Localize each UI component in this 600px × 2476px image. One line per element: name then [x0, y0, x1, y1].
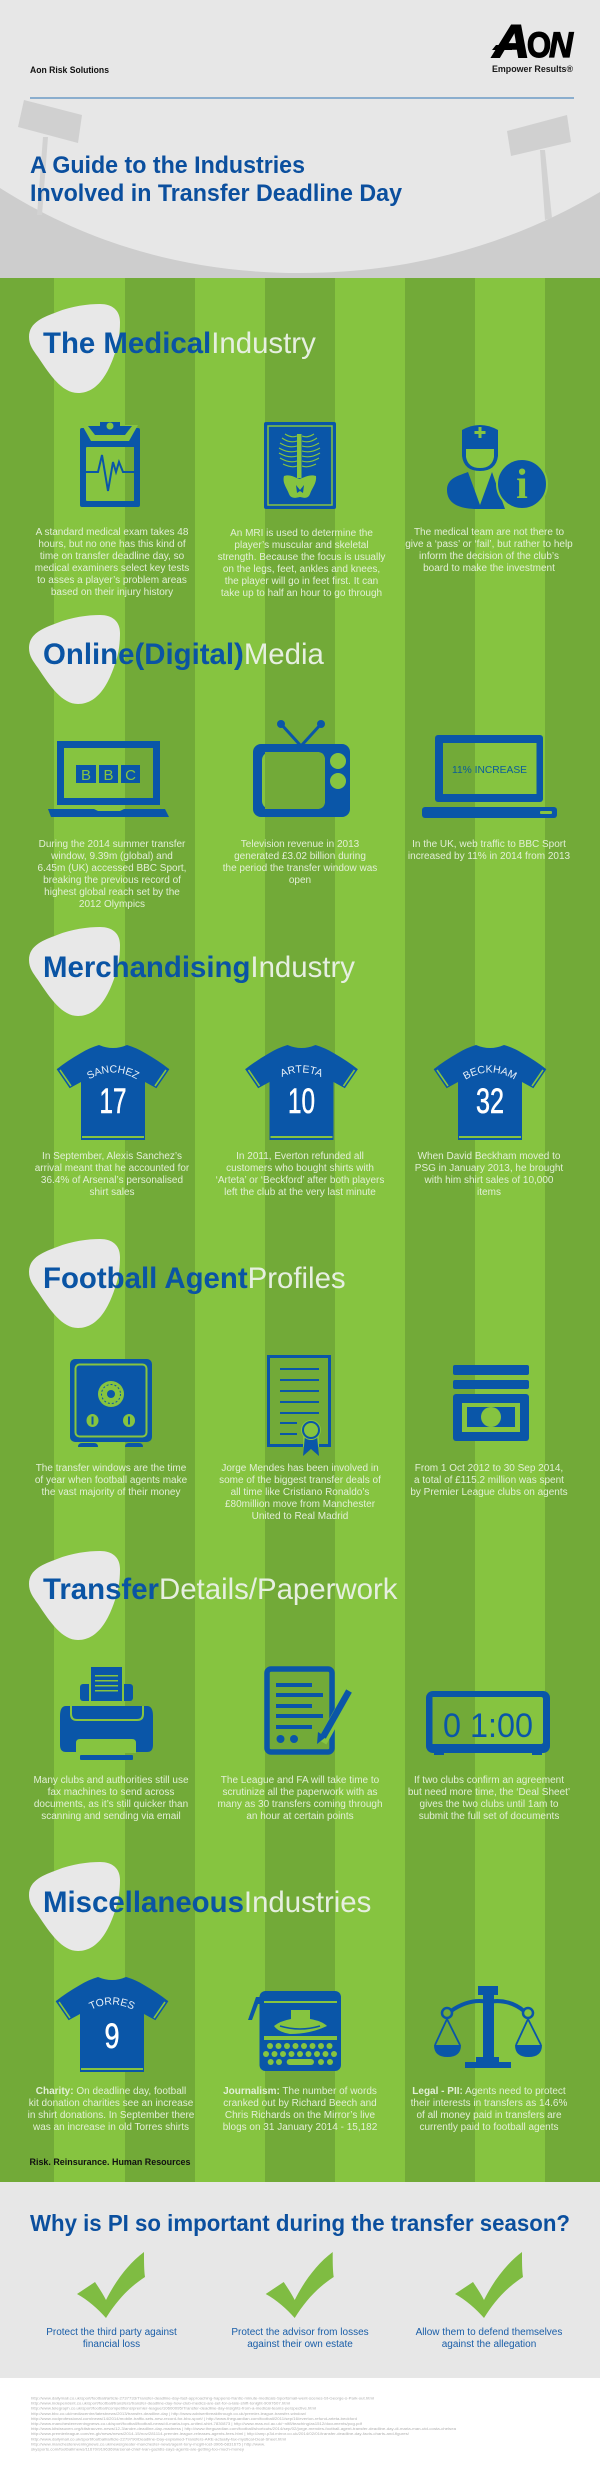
icon: scales of justice — [434, 1986, 542, 2068]
text: medical exam: based on their injury history — [51, 587, 173, 598]
panel: miscellaneous industries — [28, 1862, 568, 2168]
text: league paperwork: an hour at certain points — [246, 1811, 354, 1822]
text: web traffic: In the UK, web traffic to BBC Sport — [412, 839, 566, 850]
text: television revenue: Television revenue in 2013 — [241, 839, 360, 850]
text: fax machines: documents, as it’s still quicker than — [34, 1799, 188, 1810]
references: http://www.kitstrauven.org/kitstrauven-news/12-3/andre-deadline-day-madness | http://www.theguardian.com/football/shortcuts/2014/sep/02/jorge-mendes-football-agent-transfer-deadline-day-di-maria-man-utd-costa-chelsea — [31, 2426, 457, 2431]
background: header stadium — [0, 0, 600, 278]
text: BBC Sport reach: During the 2014 summer transfer — [39, 839, 186, 850]
logo: Aon Empower Results: Empower Results® — [492, 64, 573, 75]
logo: Aon Empower Results: N — [549, 26, 574, 65]
references: http://www.telegraph.co.uk/sport/football/competitions/premier-league/10600095/Transfer-deadline-day-insights-from-a-medical-teams-perspective.html — [31, 2406, 316, 2410]
logo: Aon Empower Results — [492, 15, 574, 75]
text: Jorge Mendes: all time like Cristiano Ronaldo’s — [231, 1487, 369, 1498]
icon: laptop with BBC logo: B — [103, 767, 114, 784]
text: Jorge Mendes: some of the biggest transfer deals of — [219, 1475, 381, 1486]
references: http://www.dailymail.co.uk/sport/football/article-2279790/Deadline-Day-explained-Transfers-ARE-actually-fax-mystical-Deal-Sheet.html — [31, 2436, 286, 2442]
text: transfer windows: the vast majority of their money — [42, 1487, 180, 1498]
heading: the medical industry: The MedicalIndustry — [43, 327, 316, 360]
icon: certificate — [268, 1356, 330, 1456]
text: Beckham: When David Beckham moved to — [418, 1151, 561, 1162]
text: MRI: on the legs, feet, ankles and knees, — [223, 564, 380, 575]
text: legal: Legal - PII: Agents need to protect — [412, 2086, 566, 2097]
text: medical exam: A standard medical exam takes 48 — [36, 527, 189, 538]
text: protect third party: financial loss — [83, 2339, 140, 2350]
text: agent spending: by Premier League clubs on agents — [410, 1487, 568, 1498]
text: deal sheet: If two clubs confirm an agreement — [414, 1775, 564, 1786]
text: transfer windows: of year when football agents make — [35, 1475, 188, 1486]
icon: typewriter — [248, 1991, 341, 2071]
references: http://www.manchestereveningnews.co.uk/sport/football/football-news/di-maria-tops-united-shirt-7830873 | http://www.mas.ncl.ac.uk/~nlf8/teaching/as1512/documents/pog.pdf — [31, 2421, 363, 2426]
icon: banknote stack — [453, 1365, 529, 1441]
text: league paperwork: scrutinize all the paperwork with as — [222, 1787, 378, 1798]
heading: online digital media: Online(Digital)Media — [43, 638, 325, 671]
heading: the medical industry — [29, 304, 316, 393]
text: Everton refund: customers who bought shirts with — [226, 1163, 374, 1174]
references: http://www.bbc.co.uk/mediacentre/latestnews/2013/transfer-deadline-day | http://www.advisertbreakthrough.co.uk/premier-league-transfer-window/ — [31, 2411, 307, 2416]
icon: clipboard with heart trace — [80, 422, 140, 507]
text: Sanchez: arrival meant that he accounted for — [35, 1163, 190, 1174]
text: protect advisor: Protect the advisor from losses — [231, 2327, 369, 2338]
text: television revenue: the period the transfer window was — [223, 863, 377, 874]
icon: x-ray — [264, 422, 336, 509]
heading: miscellaneous industries: MiscellaneousIndustries — [43, 1886, 371, 1919]
heading: merchandising industry: MerchandisingIndustry — [43, 951, 355, 984]
text: MRI: player’s muscular and skeletal — [234, 540, 369, 551]
text: league paperwork: The League and FA will take time to — [221, 1775, 380, 1786]
text: medical exam: hours, but no one has this kind of — [38, 539, 186, 550]
icon: digital clock — [426, 1691, 550, 1755]
references: http://www.premierleague.com/en-gb/news/news/2014-15/nov/281114-premier-league-releases-agents-fees.html | http://amp.p3d.mirror.co.uk/2014/02/01/transfer-deadline-day-facts-charts-and-figures/ — [31, 2431, 410, 2436]
text: charity: kit donation charities see an increase — [29, 2098, 194, 2109]
icon: laptop with 11% increase — [422, 735, 557, 818]
text: medical team: board to make the investment — [423, 563, 555, 574]
icon: check mark one — [77, 2252, 145, 2318]
heading: transfer details/paperwork: TransferDetails/Paperwork — [43, 1573, 398, 1606]
text: Jorge Mendes: Jorge Mendes has been involved in — [221, 1463, 379, 1474]
text: legal: their interests in transfers as 14.6% — [411, 2098, 567, 2109]
icon: laptop with 11% increase: 11% INCREASE — [452, 764, 527, 776]
text: journalism: Journalism: The number of words — [223, 2086, 377, 2097]
icon: Beckham shirt — [434, 1045, 546, 1140]
text: protect third party: Protect the third party against — [46, 2327, 177, 2338]
heading: miscellaneous industries — [29, 1862, 371, 1951]
text: MRI: take up to half an hour to go through — [221, 588, 382, 599]
icon: laptop with BBC logo: C — [125, 767, 136, 784]
text: agent spending: a total of £115.2 million was spent — [414, 1475, 564, 1486]
text: defend allegation: against the allegation — [442, 2339, 536, 2350]
text: Sanchez: In September, Alexis Sanchez’s — [42, 1151, 182, 1162]
icon: Arteta shirt: 10 — [288, 1082, 315, 1121]
text: legal: currently paid to football agents — [420, 2122, 558, 2133]
references: http://www.dailymail.co.uk/sport/football/article-2737733/Transfer-deadline-day-fast-approaching-happens-frantic-minute-medicals-Sportsmail-went-scenes-St-George-s-Park-out.html — [31, 2396, 374, 2400]
icon: doctor with info badge: i — [516, 462, 528, 508]
icon: doctor with info badge — [447, 425, 547, 509]
heading: transfer details/paperwork — [29, 1551, 398, 1640]
text: legal: of all money paid in transfers are — [416, 2110, 562, 2121]
panel: merchandising industry — [29, 927, 564, 1198]
icon: Arteta shirt: ARTETA — [282, 1065, 322, 1078]
text: charity: was an increase in old Torres shirts — [32, 2122, 189, 2133]
heading: football agent profiles: Football AgentProfiles — [43, 1262, 346, 1295]
text: transfer windows: The transfer windows are the time — [36, 1463, 187, 1474]
heading: merchandising industry — [29, 927, 355, 1016]
heading: why is PI so important: Why is PI so important during the transfer season? — [30, 2210, 570, 2236]
title: A Guide to the Industries — [30, 152, 305, 179]
panel: transfer details and paperwork — [29, 1551, 570, 1822]
icon: Sanchez shirt — [56, 1045, 170, 1140]
text: deal sheet: submit the full set of documents — [419, 1811, 559, 1822]
text: league paperwork: many as 30 transfers coming through — [217, 1799, 383, 1810]
icon: safe — [70, 1359, 152, 1447]
icon: check mark two — [266, 2252, 334, 2318]
text: medical team: The medical team are not there to — [414, 527, 564, 538]
icon: Beckham shirt: 32 — [476, 1082, 504, 1121]
text: Everton refund: ‘Arteta’ or ‘Beckford’ after both players — [216, 1175, 384, 1186]
text: BBC Sport reach: breaking the previous record of — [43, 875, 181, 886]
icon: digital clock: 0 1:00 — [443, 1707, 533, 1745]
text: medical exam: time on transfer deadline day, so — [40, 551, 185, 562]
text: journalism: cranked out by Richard Beech and — [223, 2098, 377, 2109]
text: journalism: blogs on 31 January 2014 - 15,182 — [223, 2122, 378, 2133]
icon: Torres shirt — [56, 1977, 168, 2072]
background: lower grey panel — [0, 2182, 600, 2378]
references: http://www.manchestereveningnews.co.uk/news/greater-manchester-news/agent-tony-mcgill-lost-3906-6831675 | http://www. — [31, 2442, 265, 2446]
text: Beckham: items — [477, 1187, 501, 1198]
text: BBC Sport reach: highest global reach set by the — [44, 887, 180, 898]
text: Sanchez: shirt sales — [89, 1187, 135, 1198]
text: MRI: the player will go in feet first. It can — [225, 576, 378, 587]
text: television revenue: generated £3.02 billion during — [234, 851, 366, 862]
text: journalism: Chris Richards on the Mirror’s live — [225, 2110, 376, 2121]
text: medical team: inform the decision of the club’s — [419, 551, 559, 562]
icon: laptop with BBC logo: B — [81, 767, 91, 784]
text: defend allegation: Allow them to defend themselves — [416, 2327, 562, 2338]
text: Beckham: with him shirt sales of 10,000 — [424, 1175, 554, 1186]
panel: football agent profiles — [29, 1239, 568, 1522]
text: deal sheet: gives the two clubs until 1am to — [420, 1799, 559, 1810]
panel: why is PI so important — [30, 2210, 570, 2350]
brand label: Aon Risk Solutions — [30, 65, 109, 75]
references: http://www.vodprofessional.com/news/14/2014/mobile-traffic-sets-new-record-for-bbc-sport/ | http://www.theguardian.com/football/2011/sep/16/everton-refund-arteta-beckford — [31, 2416, 357, 2421]
text: Jorge Mendes: United to Real Madrid — [252, 1511, 348, 1522]
text: BBC Sport reach: window, 9.39m (global) and — [50, 851, 173, 862]
text: medical exam: medical examiners select key tests — [35, 563, 189, 574]
icon: Beckham shirt: BECKHAM — [462, 1065, 517, 1080]
text: Everton refund: In 2011, Everton refunded all — [236, 1151, 364, 1162]
text: Beckham: PSG in January 2013, he brought — [415, 1163, 563, 1174]
background: pitch stripes — [0, 278, 600, 2182]
icon: Arteta shirt — [245, 1045, 358, 1140]
references — [31, 2396, 457, 2452]
text: deal sheet: but need more time, the ‘Deal Sheet’ — [408, 1787, 570, 1798]
panel: online digital media — [29, 615, 571, 910]
text: MRI: strength. Because the focus is usually — [218, 552, 385, 563]
text: Jorge Mendes: £80million move from Manchester — [225, 1499, 376, 1510]
icon: check mark three — [455, 2252, 523, 2318]
text: television revenue: open — [289, 875, 311, 886]
text: charity: in shirt donations. In September there — [28, 2110, 195, 2121]
heading: football agent profiles — [29, 1239, 346, 1328]
text: fax machines: scanning and sending via email — [41, 1811, 181, 1822]
panel: the medical industry — [29, 304, 573, 599]
text: charity: Charity: On deadline day, football — [36, 2086, 186, 2097]
references: http://www.independent.co.uk/sport/football/transfers/transfer-deadline-day-how-club-medics-are-set-for-a-late-shift-tonight-9097607.html — [31, 2400, 290, 2406]
text: Everton refund: left the club at the very last minute — [224, 1187, 376, 1198]
logo: Aon Empower Results: O — [527, 26, 551, 65]
icon: Sanchez shirt: SANCHEZ — [87, 1065, 140, 1080]
text: BBC Sport reach: 6.45m (UK) accessed BBC Sport, — [38, 863, 186, 874]
text: web traffic: increased by 11% in 2014 from 2013 — [408, 851, 571, 862]
text: fax machines: fax machines to send across — [48, 1787, 174, 1798]
icon: television — [253, 720, 350, 817]
text: MRI: An MRI is used to determine the — [230, 528, 373, 539]
text: agent spending: From 1 Oct 2012 to 30 Sep 2014, — [415, 1463, 563, 1474]
text: BBC Sport reach: 2012 Olympics — [79, 899, 145, 910]
tagline: Risk. Reinsurance. Human Resources — [30, 2157, 190, 2168]
text: protect advisor: against their own estate — [247, 2339, 353, 2350]
heading: online digital media — [29, 615, 325, 704]
icon: fax machine — [60, 1665, 153, 1760]
title: Involved in Transfer Deadline Day — [30, 180, 403, 207]
icon: Sanchez shirt: 17 — [100, 1082, 126, 1121]
text: medical exam: to asses a player’s problem areas — [37, 575, 187, 586]
references: skysports.com/football/news/11670/9196369/arsenal-chief-ivan-gazidis-says-agents-are-getting-too-much-money — [31, 2446, 244, 2452]
icon: Torres shirt: TORRES — [88, 1997, 135, 2009]
icon: Torres shirt: 9 — [104, 2017, 120, 2056]
logo: Aon Empower Results: A — [492, 15, 530, 67]
icon: document and pen — [267, 1669, 350, 1752]
text: fax machines: Many clubs and authorities still use — [33, 1775, 189, 1786]
icon: laptop with BBC logo — [48, 741, 169, 817]
text: medical team: give a ‘pass’ or ‘fail’, but rather to help — [405, 539, 573, 550]
text: Sanchez: 36.4% of Arsenal’s personalised — [41, 1175, 183, 1186]
